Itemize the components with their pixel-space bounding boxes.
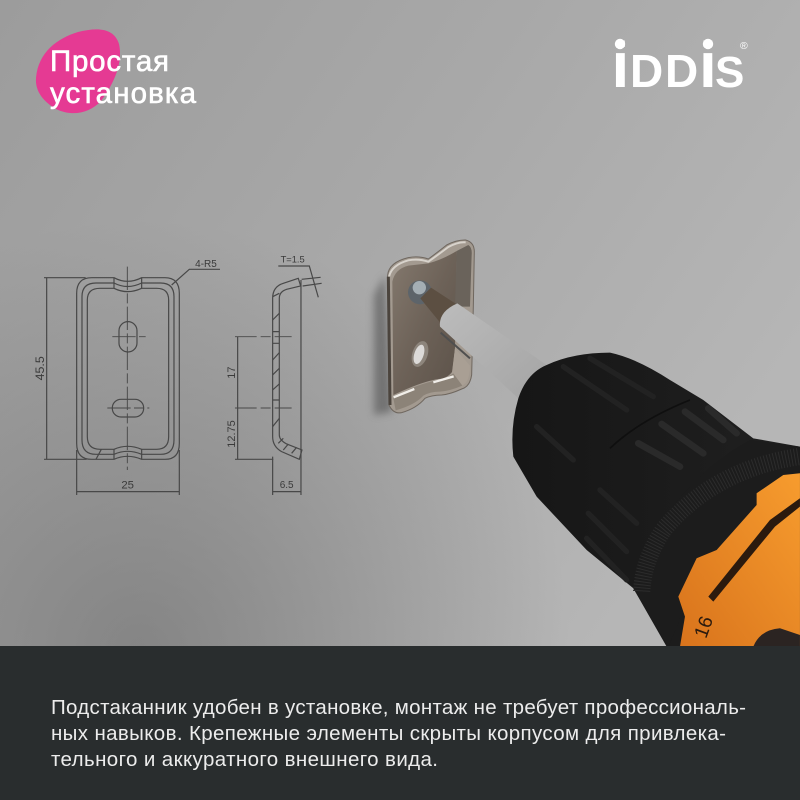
logo: IDDIS: i [699,29,717,101]
technical drawing: front view [33,259,220,495]
logo: IDDIS: S [715,48,744,97]
dimension T=1.5 [278,255,322,297]
title badge [36,29,197,113]
logo: IDDIS: D [665,45,698,97]
dimension 45.5 [33,278,87,459]
dimension 45.5: 45.5 [33,356,47,380]
centre lines [107,267,149,470]
orange body [678,473,800,647]
dimension 25 [77,450,179,495]
pink blob [36,29,120,113]
metal bracket [388,240,474,413]
chuck [512,353,800,647]
slot hole [409,339,431,369]
drill scene [440,303,800,647]
bottom panel [0,646,800,800]
dimension 4-R5 [172,259,220,285]
side profile [273,278,302,495]
dimension 25: 25 [121,479,134,491]
description text: Подстаканник удобен в установке, монтаж не требует профессиональ- [51,696,746,719]
dimension 12.75 [226,408,273,459]
dark marking line [708,498,800,602]
dimension 17: 17 [226,367,238,379]
dark switch [753,628,800,647]
bracket shadow [374,275,392,415]
centre lines [235,337,292,408]
screwdriver bit [420,288,458,322]
heading: установка [50,77,197,110]
heading: Простая [50,45,169,78]
dimension 17 [226,337,238,408]
technical drawing: side view [226,255,322,495]
mounting slots [119,322,137,352]
dimension 4-R5: 4-R5 [195,259,217,270]
dimension 12.75: 12.75 [226,420,238,448]
logo: IDDIS: ® [740,40,748,52]
screw [408,280,432,304]
dimension T=1.5: T=1.5 [281,255,305,265]
dimension 6.5: 6.5 [280,480,294,491]
logo: IDDIS: D [630,45,663,97]
knurled collar [633,440,800,647]
speed number: 16 [691,614,718,641]
grey shaft [440,303,547,398]
dimension 6.5 [273,457,301,495]
logo: IDDIS: i [612,29,629,101]
description text: ных навыков. Крепежные элементы скрыты корпусом для привлека- [51,722,726,745]
bracket outline [77,278,179,459]
description text: тельного и аккуратного внешнего вида. [51,748,438,771]
logo: IDDIS [612,29,748,101]
